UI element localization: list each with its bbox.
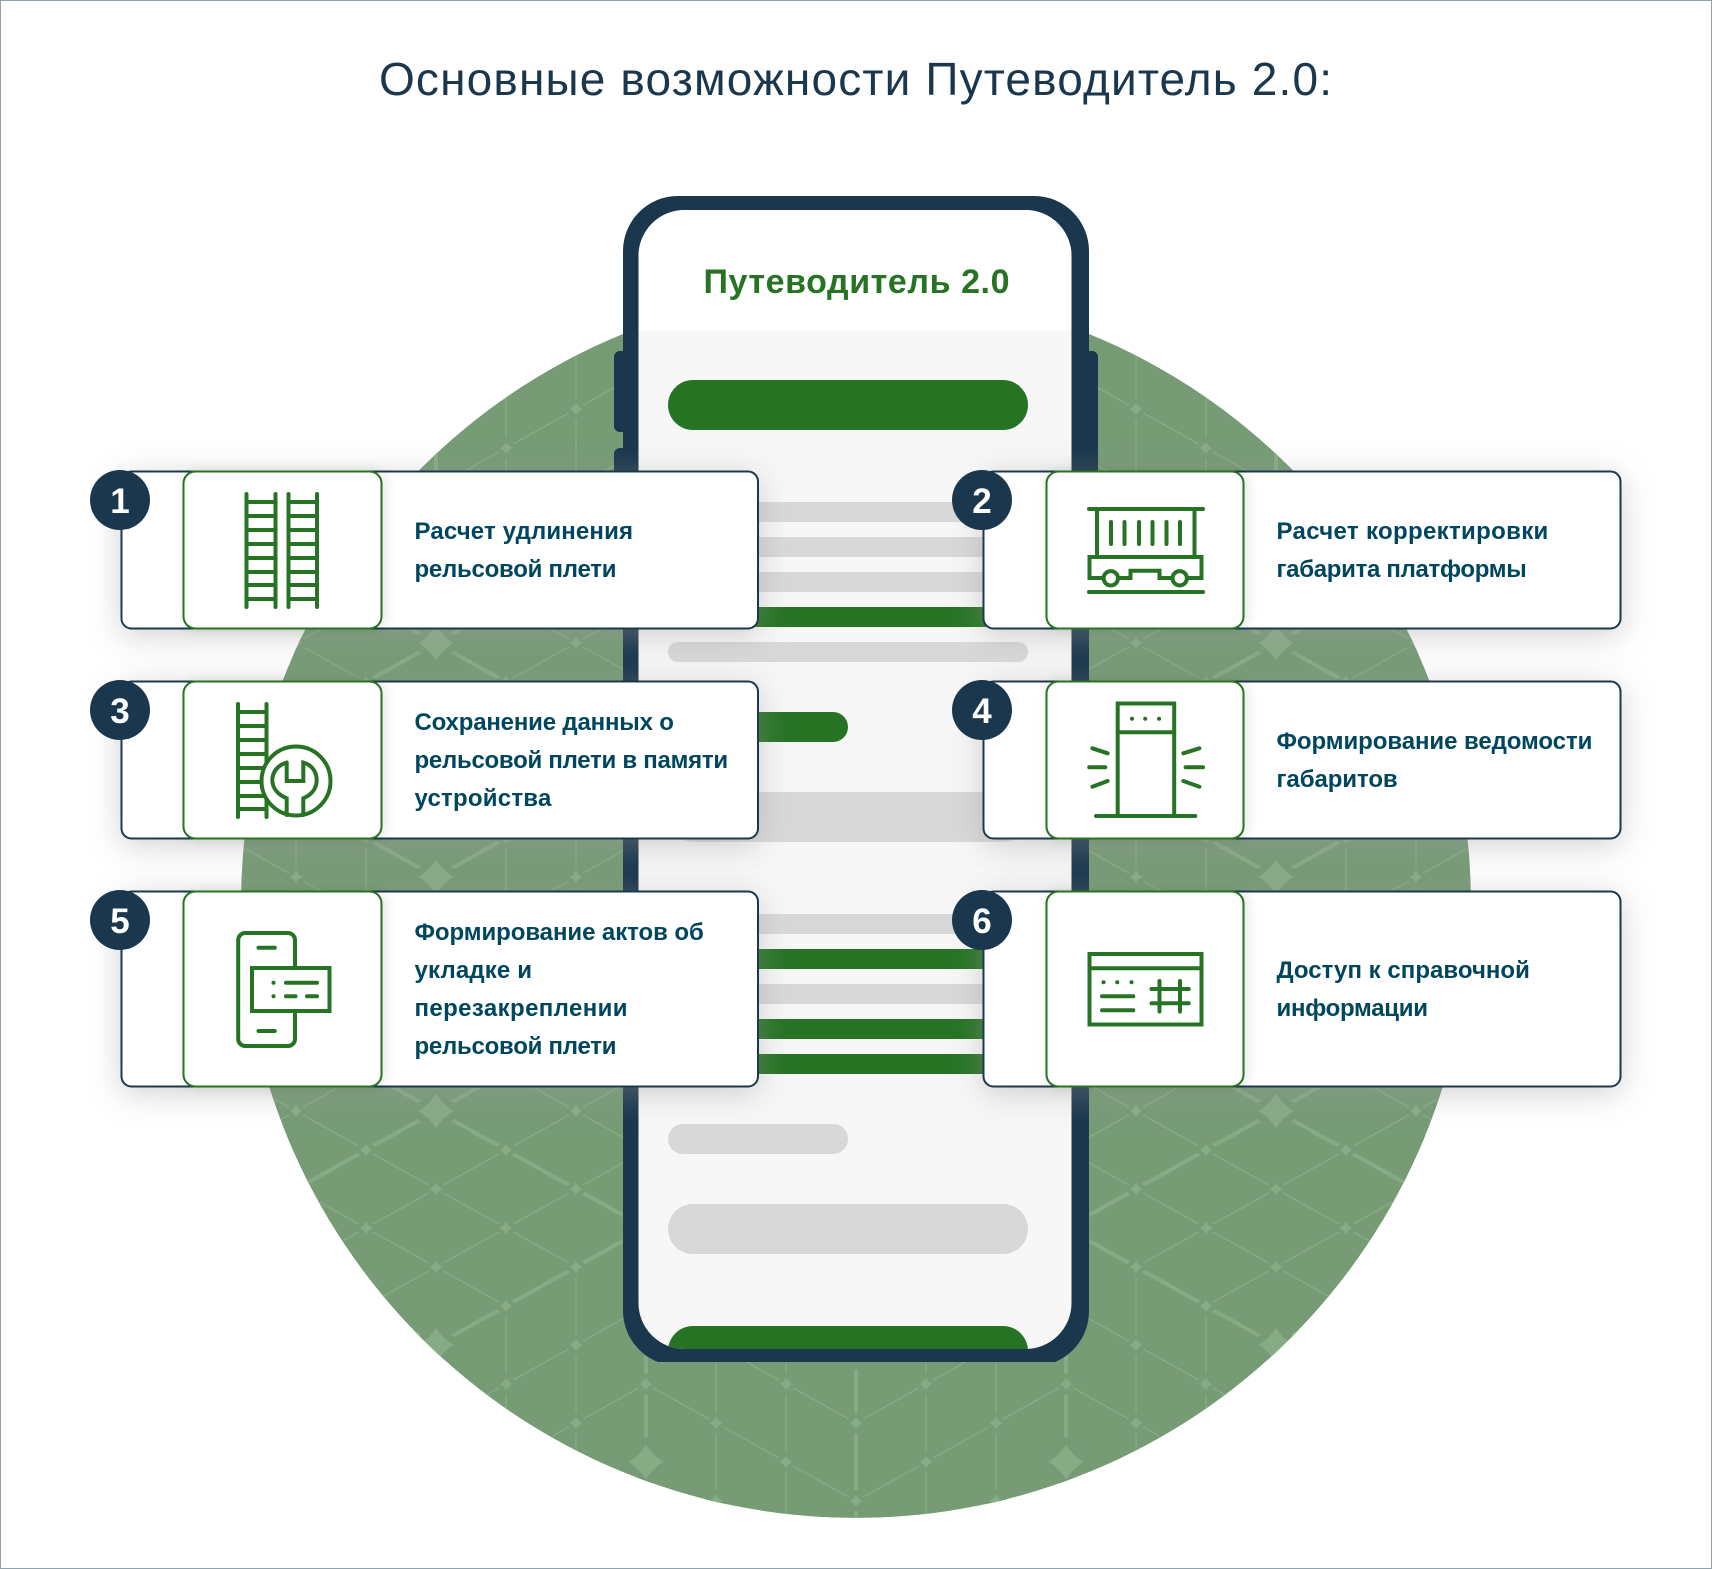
card 6 (952, 890, 1620, 1086)
card 2 text: Расчет корректировки (1276, 518, 1548, 545)
card 5 text: рельсовой плети (414, 1033, 616, 1060)
badge 5 (90, 890, 150, 950)
card 3 (90, 680, 758, 838)
badge 3 (90, 680, 150, 740)
card 5 text: укладке и (414, 957, 532, 984)
icon: ladder with wrench (238, 704, 330, 817)
card 4 text (1276, 728, 1592, 793)
phone screen (638, 210, 1072, 1376)
card 2 (952, 470, 1620, 628)
card 1 text (414, 518, 633, 583)
card 6 text: Доступ к справочной (1276, 957, 1530, 984)
badge 5: 5 (110, 902, 130, 941)
phone heading: Путеводитель 2.0 (704, 263, 1010, 301)
card 2 text (1276, 518, 1548, 583)
badge 6: 6 (972, 902, 992, 941)
card 5 text (414, 919, 704, 1060)
icon: reference window (1090, 954, 1202, 1024)
icon: rail platform wagon (1089, 509, 1203, 592)
card 4 text: Формирование ведомости (1276, 728, 1592, 755)
card 3 text: рельсовой плети в памяти (414, 747, 728, 774)
card 5 text: Формирование актов об (414, 919, 704, 946)
icon: clearance gate (1089, 704, 1203, 816)
badge 4 (952, 680, 1012, 740)
badge 3: 3 (110, 692, 130, 731)
card 5 (90, 890, 758, 1086)
card 1 (90, 470, 758, 628)
card 6 text: информации (1276, 995, 1428, 1022)
icon: mobile device with document (238, 933, 330, 1046)
phone mockup (614, 196, 1098, 1376)
title: Основные возможности Путеводитель 2.0: (379, 53, 1332, 105)
badge 2: 2 (972, 482, 992, 521)
card 3 text (414, 709, 728, 812)
background circle with lattice pattern (241, 334, 1471, 1518)
card 2 text: габарита платформы (1276, 556, 1527, 583)
badge 1: 1 (110, 482, 130, 521)
card 1 text: Расчет удлинения (414, 518, 633, 545)
card 6 text (1276, 957, 1530, 1022)
card 3 text: устройства (414, 785, 552, 812)
card 3 text: Сохранение данных о (414, 709, 674, 736)
card 4 text: габаритов (1276, 766, 1398, 793)
badge 1 (90, 470, 150, 530)
card 1 text: рельсовой плети (414, 556, 616, 583)
green header bar (668, 380, 1028, 430)
badge 6 (952, 890, 1012, 950)
icon: rail ladders (246, 494, 317, 607)
card 5 text: перезакреплении (414, 995, 628, 1022)
card 4 (952, 680, 1620, 838)
badge 4: 4 (972, 692, 992, 731)
badge 2 (952, 470, 1012, 530)
